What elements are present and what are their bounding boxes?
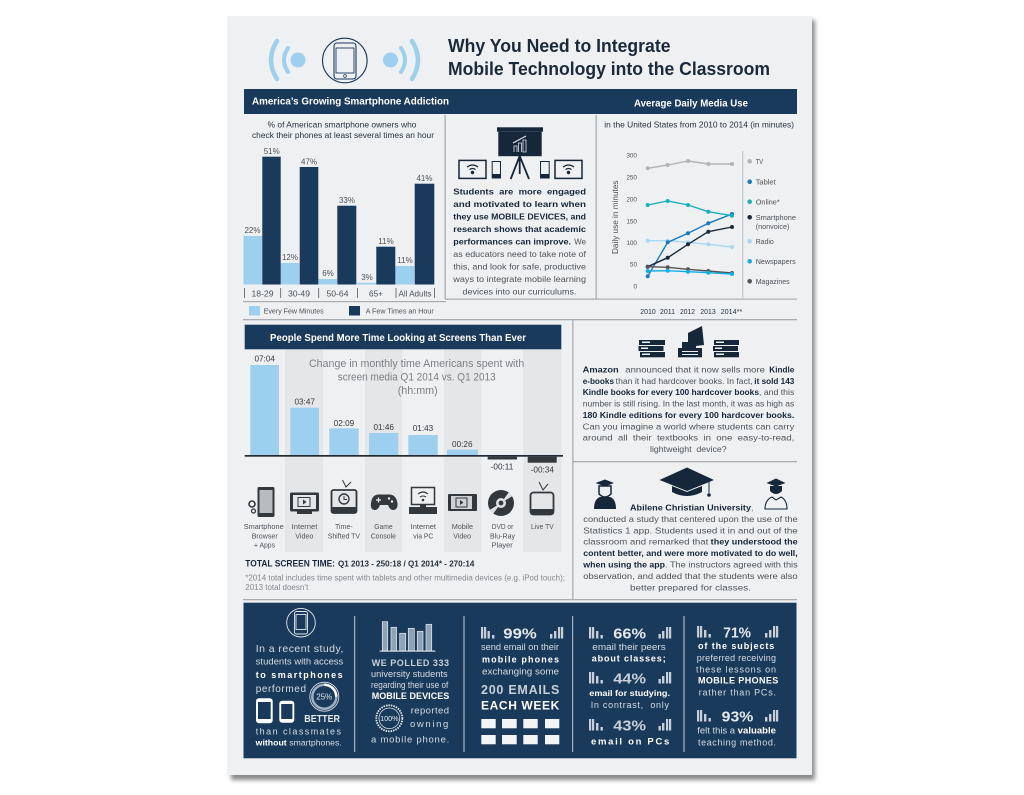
column: smartphone study: BETTER: [304, 714, 341, 725]
text block: Amazon: around all their textbooks in one easy-to-read,: [583, 432, 794, 442]
chart legend: [249, 306, 434, 316]
text block: engagement: [452, 186, 587, 296]
icon: books and typewriter: [638, 326, 739, 357]
text block: Amazon: 180 Kindle editions for every 100 hardcover books.: [583, 410, 794, 420]
panel: survey statistics: [244, 603, 796, 758]
bar chart: 50-64: [326, 290, 349, 298]
y axis labels: 150: [626, 218, 637, 226]
device labels: Browser: [252, 531, 278, 540]
text block: Amazon: Can you imagine a world where students can carry: [583, 421, 795, 431]
y axis labels: 50: [630, 262, 637, 268]
text block: Abilene study: classroom and remarked that: [583, 537, 709, 547]
column: lesson preferences: rather than PCs.: [699, 687, 776, 697]
panel heading: People Spend More Time Looking at Screens Than Ever: [270, 333, 526, 344]
column: smartphone study: performed: [256, 684, 306, 695]
column: email habits: exchanging some: [482, 666, 559, 676]
text block: Amazon: [583, 364, 795, 454]
y axis labels: 200: [626, 196, 637, 204]
chart heading: [252, 120, 434, 140]
text block: Amazon: Kindle: [769, 364, 795, 374]
icon: presentation board and devices: [459, 127, 582, 179]
y axis title: Daily use in minutes: [610, 180, 620, 254]
series: Newspapers: [646, 269, 734, 276]
device labels: Smartphone: [244, 522, 284, 531]
column: email habits: mobile phones: [482, 655, 559, 665]
chart legend: [742, 151, 796, 298]
column: poll: university students: [371, 669, 448, 679]
stat: 71 percent: 71%: [723, 625, 751, 642]
column: poll: regarding their use of: [371, 680, 449, 690]
bar chart: 00:26: [452, 440, 473, 449]
panel: students engaged: [452, 127, 587, 296]
chart subtitle: screen media Q1 2014 vs. Q1 2013: [338, 372, 496, 384]
text block: engagement: they use MOBILE DEVICES, and: [453, 212, 586, 222]
bar chart: 02:09: [334, 419, 355, 428]
column stripes: [285, 349, 561, 552]
text block: Abilene study: conducted a study that centered upon the use of the: [583, 514, 798, 524]
text block: Amazon: number is still rising. In the last month, it was as high as: [583, 398, 794, 408]
column: email purposes: email for studying.: [589, 688, 670, 698]
icon: envelopes: [481, 719, 559, 744]
panel: Abilene Christian University: [582, 468, 798, 592]
column: email purposes: [589, 625, 671, 748]
total screen time: [245, 558, 475, 568]
column: lesson preferences: preferred receiving: [697, 653, 776, 663]
x axis labels: 2014**: [721, 309, 743, 316]
icon: internet video: [290, 492, 319, 514]
device labels: Time-: [335, 522, 353, 531]
chart heading: check their phones at least several times an hour: [252, 130, 434, 140]
device labels: + Apps: [254, 540, 275, 550]
series: Online: [646, 199, 734, 218]
text block: engagement: and motivated to learn when: [453, 199, 586, 209]
x axis labels: [640, 309, 743, 316]
icon: DVD disc: [488, 490, 514, 516]
column: lesson preferences: [696, 625, 778, 747]
stat: 93 percent: 93%: [722, 709, 753, 726]
text block: Amazon: it sold 143: [754, 376, 795, 386]
text block: Abilene study: [582, 502, 798, 592]
text block: engagement: as educators need to take note of: [453, 249, 587, 259]
x axis labels: 2012: [680, 309, 695, 316]
text block: Abilene study: . The instructors agreed with this: [665, 559, 798, 569]
stat: 44 percent: 44%: [613, 670, 646, 687]
column: smartphone study: to smartphones: [256, 670, 343, 680]
y axis labels: 250: [626, 174, 637, 182]
column: lesson preferences: these lessons on: [696, 665, 776, 675]
column: email purposes: email on PCs: [591, 737, 669, 748]
chart subtitle: Change in monthly time Americans spent with: [309, 358, 524, 370]
column: lesson preferences: valuable: [738, 725, 776, 735]
x axis labels: 2010: [640, 309, 656, 316]
device labels: via PC: [413, 531, 434, 540]
text block: Abilene study: Abilene Christian University: [630, 502, 751, 512]
chart legend: Every Few Minutes: [264, 306, 324, 316]
device labels: Player: [492, 540, 513, 550]
chart subtitle: (hh:mm): [398, 385, 438, 397]
bar chart: 12%: [282, 253, 298, 262]
column: email habits: EACH WEEK: [481, 699, 560, 713]
text block: Amazon: Amazon: [583, 364, 619, 374]
text block: Abilene study: Statistics 1 app. Students used it in and out of the: [583, 525, 798, 535]
column: smartphone study: students with access: [256, 656, 344, 666]
chart legend: Smartphone: [756, 213, 796, 222]
chart heading: % of American smartphone owners who: [268, 120, 417, 130]
stat: 43 percent: 43%: [613, 718, 646, 735]
column: lesson preferences: MOBILE PHONES: [698, 676, 778, 686]
device labels: Internet: [411, 522, 436, 531]
icon: mobile video: [448, 494, 477, 511]
bar chart: -00:11: [491, 462, 514, 471]
column: smartphone study: [255, 608, 344, 748]
text block: Abilene study: they understood the: [711, 537, 798, 547]
chart legend: Tablet: [756, 177, 777, 186]
bar chart: 03:47: [294, 398, 315, 407]
text block: Abilene study: observation, and added that the students were also: [583, 571, 798, 581]
stat: 66 percent: 66%: [613, 625, 646, 642]
icon: game console: [371, 494, 398, 510]
column: email habits: send email on their: [481, 642, 559, 652]
series: Magazines: [646, 265, 734, 275]
icon: internet via PC: [409, 488, 437, 514]
column: lesson preferences: felt this a: [697, 725, 735, 735]
bar chart: 30-49: [288, 290, 310, 298]
device labels: Live TV: [531, 522, 554, 531]
chart legend: (nonvoice): [756, 222, 790, 231]
text block: engagement: We: [574, 236, 586, 246]
bar chart: 33%: [339, 196, 355, 205]
column: smartphone study: than classmates: [256, 726, 342, 736]
device labels: Game: [374, 522, 393, 531]
text block: engagement: this, and look for safe, productive: [453, 262, 586, 272]
series: Radio: [646, 239, 734, 249]
panel: Amazon Kindle: [583, 326, 795, 454]
bar chart: 51%: [264, 147, 280, 156]
footnote: 2013 total doesn’t: [245, 583, 309, 592]
device labels: Video: [295, 531, 313, 540]
text block: Amazon: Kindle books for every 100 hardcover books: [583, 387, 759, 397]
icon: live TV: [530, 482, 554, 514]
bar chart: 11%: [397, 256, 413, 265]
panel dividers: [243, 115, 797, 600]
panel: time looking at screens: [244, 325, 565, 592]
y axis labels: 100: [626, 240, 637, 247]
column: lesson preferences: teaching method.: [698, 737, 776, 747]
panel: smartphone checking bar chart: [244, 120, 435, 316]
icon: smartphone with signal waves: [271, 38, 418, 83]
column: lesson preferences: of the subjects: [698, 641, 774, 651]
bar chart: 18-29: [252, 290, 274, 298]
icon: tablets: [256, 698, 294, 723]
column: poll: owning: [410, 719, 448, 730]
chart legend: A Few Times an Hour: [366, 306, 434, 316]
text block: Abilene study: when using the app: [582, 559, 665, 569]
text block: Amazon: , and this: [759, 387, 794, 397]
total screen time: Q1 2013 - 250:18 / Q1 2014* - 270:14: [338, 560, 475, 568]
text block: Amazon: lightweight device?: [650, 444, 727, 454]
chart legend: Online*: [756, 197, 780, 206]
bar chart: 6%: [322, 269, 334, 278]
device labels: Console: [371, 531, 396, 540]
bar chart: All Adults: [398, 290, 432, 298]
text block: Abilene study: ,: [751, 502, 753, 512]
title: Mobile Technology into the Classroom: [448, 58, 770, 79]
icon: 100 percent ring: 100%: [380, 714, 399, 723]
device labels: Blu-Ray: [490, 531, 515, 540]
bar chart: 01:43: [413, 424, 434, 433]
icon: time-shifted TV: [332, 480, 356, 513]
text block: engagement: ways to integrate mobile learning: [452, 274, 586, 284]
chart subtitle: [309, 358, 524, 397]
y axis labels: [626, 152, 637, 290]
device labels: Shifted TV: [328, 531, 360, 540]
y axis labels: 300: [626, 152, 637, 160]
column: poll: a mobile phone.: [371, 734, 449, 746]
column: poll: WE POLLED 333: [372, 658, 449, 668]
text block: Amazon: e-books: [583, 376, 614, 386]
text block: Abilene study: content better, and were more motivated to do well,: [583, 548, 798, 558]
bar chart: 3%: [361, 273, 373, 282]
header band: smartphone addiction and media use: Average Daily Media Use: [634, 98, 748, 110]
series: Smartphone: [646, 225, 734, 269]
bar chart: 41%: [416, 174, 433, 183]
text block: engagement: performances can improve.: [453, 236, 571, 246]
icon: 25 percent ring: 25%: [316, 692, 332, 702]
chart legend: Newspapers: [756, 257, 796, 266]
device labels: [244, 522, 554, 550]
title: Why You Need to Integrate: [448, 35, 670, 56]
bar chart: 11%: [378, 237, 394, 246]
y axis labels: 0: [633, 284, 637, 290]
device labels: Mobile: [452, 522, 473, 531]
chart legend: Radio: [756, 237, 774, 246]
bar chart: [245, 355, 563, 475]
bar chart: 65+: [369, 290, 383, 298]
text block: engagement: Students are more engaged: [453, 186, 586, 196]
column: email purposes: In contrast, only: [591, 700, 670, 710]
chart legend: Magazines: [756, 277, 790, 286]
text block: engagement: devices into our curriculums.: [462, 286, 576, 296]
column: poll: [371, 622, 449, 746]
chart legend: TV: [756, 157, 764, 166]
column: email purposes: about classes;: [592, 654, 666, 664]
text block: Abilene study: better prepared for classes.: [630, 582, 751, 592]
header band: smartphone addiction and media use: America’s Growing Smartphone Addiction: [252, 96, 449, 108]
stat: 99 percent: 99%: [503, 625, 537, 642]
icon: bar graph: [380, 622, 435, 651]
text block: Amazon: announced that it now sells more: [625, 364, 765, 374]
column: email habits: [481, 625, 563, 744]
footnote: *2014 total includes time spent with tablets and other multimedia devices (e.g. iPod touch);: [245, 574, 565, 582]
device labels: Video: [453, 531, 471, 540]
series: TV: [646, 159, 734, 170]
series: Tablet: [646, 212, 734, 278]
panel: average daily media use line chart: [604, 120, 796, 316]
icon: student left: [594, 480, 616, 509]
icon: smartphone browser: [249, 487, 274, 517]
bar chart: 07:04: [254, 355, 275, 364]
bar chart: [244, 147, 435, 298]
x axis labels: 2011: [660, 309, 675, 316]
icon: phone in circle: [287, 608, 315, 637]
icon: student right: [765, 478, 787, 509]
text block: engagement: research shows that academic: [453, 224, 586, 234]
icon: graduation cap: [660, 468, 714, 497]
column: poll: reported: [411, 706, 449, 716]
column: email habits: 200 EMAILS: [481, 683, 559, 697]
device labels: Internet: [292, 522, 317, 531]
card shadow: [231, 20, 815, 780]
device icons: [249, 480, 554, 517]
panel heading: [245, 325, 561, 349]
bar chart: 01:46: [373, 423, 394, 432]
line chart: [646, 159, 734, 278]
footnote: [245, 574, 565, 592]
bar chart: -00:34: [531, 466, 554, 475]
device labels: DVD or: [492, 522, 514, 531]
total screen time: TOTAL SCREEN TIME:: [245, 558, 335, 568]
bar chart: 47%: [301, 158, 317, 166]
bar chart: 22%: [244, 226, 261, 235]
header band: smartphone addiction and media use: [244, 89, 797, 114]
card background: [227, 16, 812, 775]
text block: Amazon: than it had hardcover books. In fact,: [616, 376, 753, 386]
x axis labels: 2013: [700, 309, 716, 316]
column: email purposes: email their peers: [592, 642, 666, 652]
column: poll: MOBILE DEVICES: [372, 691, 449, 701]
title: [448, 35, 770, 79]
column: smartphone study: smartphones.: [289, 738, 342, 748]
chart subtitle: in the United States from 2010 to 2014 (in minutes): [604, 120, 794, 130]
column: smartphone study: In a recent study,: [256, 643, 343, 655]
column: smartphone study: without: [255, 738, 287, 748]
